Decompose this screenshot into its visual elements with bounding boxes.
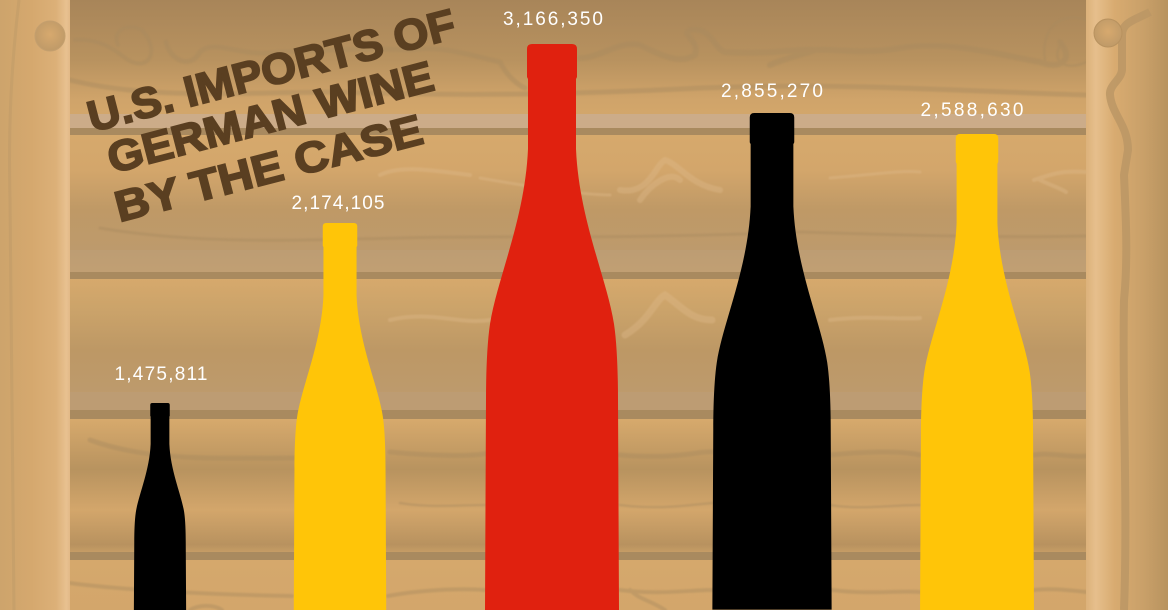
light grain swirls bbox=[380, 160, 1086, 335]
right wooden post bbox=[1086, 0, 1168, 610]
icon: left peg bbox=[35, 21, 65, 51]
bottle: 2,855,270 bbox=[712, 81, 832, 610]
value label: 2,588,630 bbox=[920, 100, 1024, 121]
bottle: 1,475,811 bbox=[114, 364, 208, 610]
bottle: 2,588,630 bbox=[920, 100, 1034, 610]
value label: 1,475,811 bbox=[114, 364, 208, 385]
value label: 3,166,350 bbox=[503, 9, 603, 30]
title: U.S. IMPORTS OF bbox=[82, 1, 460, 142]
title: BY THE CASE bbox=[110, 106, 428, 232]
title: GERMAN WINE bbox=[102, 53, 439, 183]
bottle: 2,174,105 bbox=[292, 193, 386, 610]
bottle: 3,166,350 bbox=[485, 9, 619, 610]
icon: right peg bbox=[1094, 19, 1122, 47]
value label: 2,174,105 bbox=[292, 193, 384, 214]
left wooden post bbox=[0, 0, 70, 610]
value label: 2,855,270 bbox=[721, 81, 823, 102]
title bbox=[82, 1, 484, 233]
